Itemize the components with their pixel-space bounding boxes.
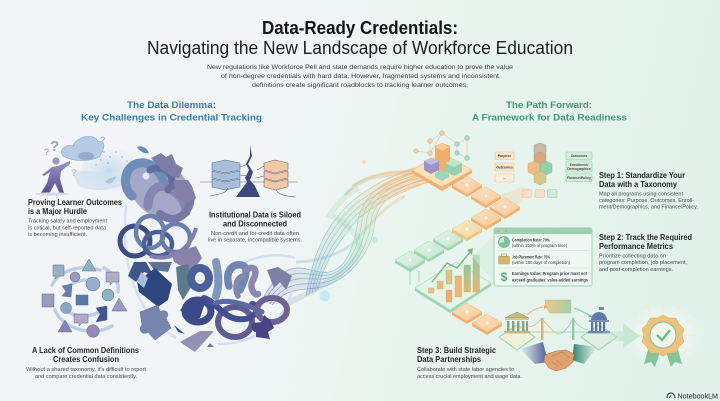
icon: cube platform	[412, 143, 472, 191]
heading: Step 3: Build Strategic	[417, 346, 496, 355]
dna helix transition	[262, 160, 430, 305]
body text: Collaborate with state labor agencies to	[417, 367, 514, 373]
body text: Non-credit and for-credit data often	[211, 231, 299, 237]
icon: category labels left: Purpose	[498, 154, 511, 158]
heading: Institutional Data is Siloed	[209, 210, 301, 220]
heading: the data dilemma: Key Challenges in Credential Tracking	[81, 112, 262, 124]
icon: confused person	[35, 157, 70, 196]
body text: and compare credential data consistently.	[35, 374, 137, 380]
ring knot	[120, 216, 196, 258]
icon: data cloud	[62, 136, 128, 166]
body text: access crucial employment and wage data.	[417, 374, 522, 380]
intro text: definitions create significant roadblocks to tracking learner outcomes.	[252, 82, 468, 89]
icon: split servers and crack	[200, 145, 298, 197]
body text	[28, 218, 107, 238]
metric text: exceed graduates' value-added earnings	[512, 278, 588, 282]
icon: category labels left	[495, 152, 514, 182]
heading: Step 1: Standardize Your	[599, 171, 685, 180]
metrics card	[472, 228, 592, 286]
lower path tiles	[452, 303, 502, 335]
heading: Data with a Taxonomy	[599, 180, 678, 189]
metric text: (within 180 days of completion)	[512, 260, 570, 265]
intro text: of non-degree credentials with hard data. However, fragmented systems and inconsistent	[221, 73, 499, 80]
icon: category labels right	[566, 152, 592, 182]
heading	[599, 171, 685, 189]
heading: the data dilemma: The Data Dilemma:	[127, 100, 216, 111]
icon: certification badge	[623, 302, 703, 367]
body text: ment/Demographics, and Finance/Policy.	[599, 204, 698, 210]
body text: live in separate, incompatible systems.	[208, 238, 302, 244]
icon: swirling shapes	[42, 259, 127, 337]
title	[147, 18, 573, 58]
icon: handshake	[520, 342, 597, 371]
body text: is becoming insufficient.	[28, 232, 87, 238]
metric text	[512, 238, 588, 282]
icon: question marks	[44, 135, 106, 179]
icon: dollar sign: $	[501, 270, 508, 284]
icon: category labels right: Outcomes	[571, 154, 587, 158]
icon: completion pie	[499, 237, 509, 247]
icon: briefcase	[498, 254, 510, 264]
heading: the path forward	[472, 100, 627, 124]
lower letter-like curves	[185, 262, 287, 337]
icon: chart platform	[410, 248, 491, 313]
heading: A Lack of Common Definitions	[32, 346, 140, 355]
icon: category labels right: Finance/Policy	[567, 176, 591, 180]
body text: and post-completion earnings.	[599, 267, 673, 273]
heading: the path forward: The Path Forward:	[506, 100, 592, 111]
body text: is critical, but self-reported data	[28, 226, 107, 232]
icon: sorted cube stack	[528, 143, 552, 185]
heading: Step 2: Track the Required	[599, 233, 692, 242]
heading: Proving Learner Outcomes	[28, 198, 122, 207]
body text: Prioritize collecting data on	[599, 254, 666, 260]
icon: category labels right: Enrollment/	[570, 163, 588, 167]
metric text: Earnings Value: Program price must not	[512, 271, 587, 276]
body text	[26, 367, 146, 380]
title: Data-Ready Credentials:	[262, 18, 458, 38]
notebooklm logo: NotebookLM	[678, 392, 718, 400]
icon: category labels left: Outcomes	[496, 165, 513, 169]
puzzle piece	[140, 305, 171, 340]
icon: question marks: ?	[100, 135, 106, 145]
panel: proving learner outcomes	[28, 135, 149, 238]
panel: step 2 metrics	[410, 228, 692, 313]
body text	[599, 254, 687, 273]
body text	[417, 367, 522, 380]
heading	[209, 210, 301, 228]
icon: category labels right: Demographics	[567, 167, 591, 171]
heading	[417, 346, 496, 364]
intro text	[207, 64, 513, 89]
icon: question marks: ?	[71, 168, 77, 179]
intro text: New regulations like Workforce Pell and state demands require higher education to prove the value	[207, 64, 513, 71]
icon: question marks: ?	[44, 147, 50, 157]
icon: small squares	[522, 190, 557, 198]
heading: is a Major Hurdle	[28, 207, 87, 216]
body text: Map all programs using consistent	[599, 192, 683, 198]
icon: node network	[414, 131, 469, 160]
icon: wave swirl	[72, 146, 149, 191]
icon: question marks: ?	[50, 138, 59, 155]
heading: Performance Metrics	[599, 242, 674, 251]
broken fragments	[172, 246, 202, 272]
body text	[208, 231, 302, 244]
pale swirl trails	[125, 205, 295, 344]
heading: the path forward: A Framework for Data Readiness	[472, 112, 627, 124]
icon: institutions and bridge	[499, 300, 617, 350]
heading: Data Partnerships	[417, 355, 482, 364]
body text: Tracking salary and employment	[28, 218, 107, 224]
heading: the data dilemma	[81, 100, 262, 124]
panel: step 3 partnerships	[417, 300, 703, 380]
body text	[599, 192, 698, 210]
panel: lack of common definitions	[26, 259, 146, 380]
heading: Creates Confusion	[53, 355, 119, 364]
tangled data knots and puzzle pieces	[120, 153, 295, 352]
metric text: (within 150% of program time)	[512, 243, 567, 248]
panel: institutional data siloed	[200, 145, 302, 244]
path tiles	[395, 176, 530, 272]
heading	[599, 233, 692, 251]
body text: Without a shared taxonomy, it's difficult to report	[26, 367, 146, 373]
arrow	[600, 323, 640, 348]
heading: and Disconnected	[223, 220, 287, 228]
heading	[32, 346, 140, 364]
title: Navigating the New Landscape of Workforce Education	[147, 38, 573, 58]
body text: program completion, job placement,	[599, 260, 687, 266]
panel: step 1 taxonomy	[412, 131, 698, 210]
body text: categories: Purpose, Outcomes, Enroll-	[599, 198, 694, 204]
metric text: Completion Rate: 70%	[512, 238, 550, 242]
icon: category labels left: ...	[503, 176, 506, 180]
upper curved shapes	[127, 160, 194, 221]
heading	[28, 198, 122, 216]
metric text: Job Placement Rate: 70%	[512, 254, 550, 260]
